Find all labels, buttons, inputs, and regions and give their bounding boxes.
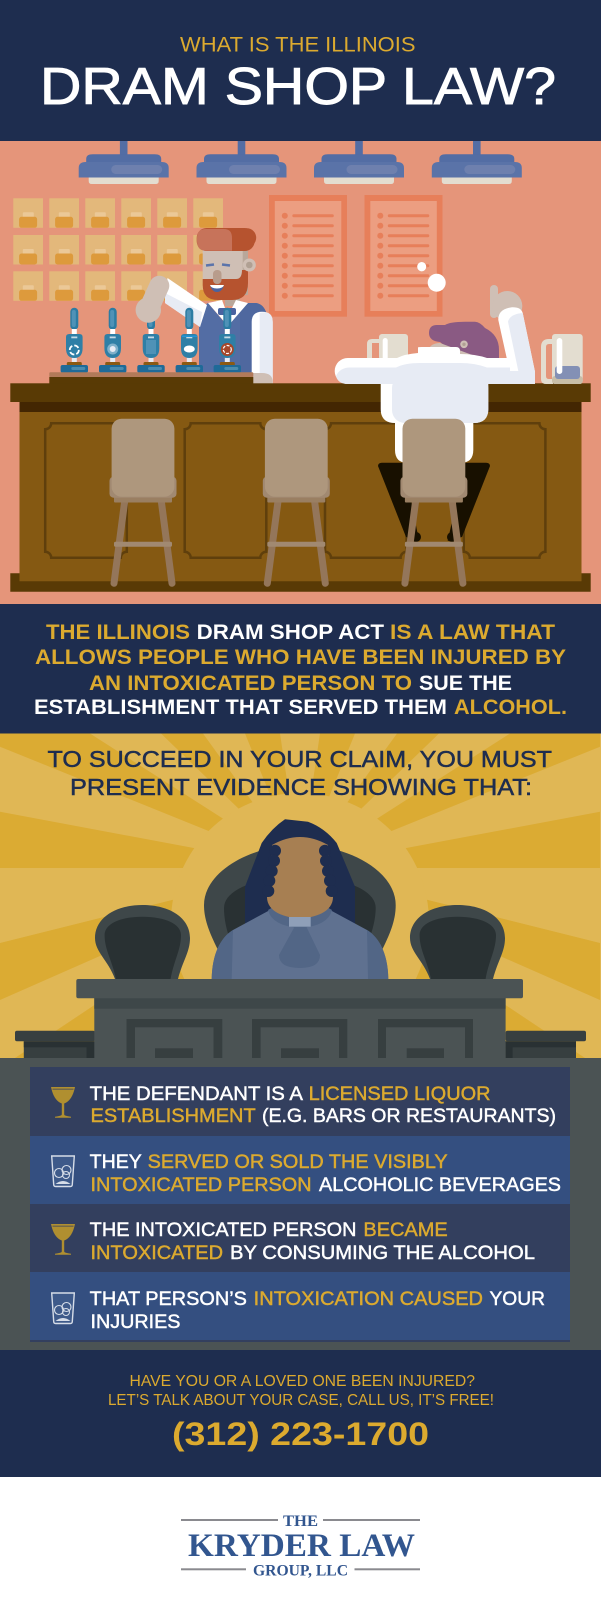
bar stools	[110, 419, 467, 583]
row 3 text: BECAME	[363, 1219, 448, 1241]
panel: judge scene	[0, 734, 601, 1058]
row 2	[30, 1136, 570, 1204]
row 4 text: YOUR	[490, 1288, 545, 1310]
bottle shelves	[13, 198, 223, 301]
row 1 text: THE DEFENDANT IS A	[90, 1083, 303, 1105]
heading: TO SUCCEED IN YOUR CLAIM, YOU MUST	[48, 746, 552, 772]
panel: call to action	[0, 1350, 601, 1477]
panel: definition: IS A LAW THAT	[390, 621, 555, 644]
panel: definition: THE ILLINOIS	[46, 621, 190, 644]
call to action text: LET’S TALK ABOUT YOUR CASE, CALL US, IT’S FREE!	[108, 1392, 494, 1409]
icon: cocktail glass	[51, 1224, 75, 1255]
side benches	[15, 1031, 586, 1058]
halo	[171, 793, 429, 1051]
row 1 text	[90, 1083, 556, 1127]
row 4 text	[90, 1288, 545, 1333]
bartender	[165, 228, 273, 384]
row 4 text: INJURIES	[90, 1311, 180, 1333]
judge chair	[204, 845, 396, 950]
row 1 text: (E.G. BARS OR RESTAURANTS)	[262, 1105, 556, 1127]
logo: GROUP, LLC	[253, 1563, 348, 1580]
row 3 text: INTOXICATED	[90, 1242, 223, 1264]
row 3 text: BY CONSUMING THE ALCOHOL	[230, 1242, 535, 1264]
panel: definition: ESTABLISHMENT THAT SERVED THEM	[34, 696, 447, 719]
row 1	[30, 1067, 570, 1136]
side chair right	[410, 905, 505, 979]
right mug	[541, 334, 583, 384]
side chair left	[95, 905, 190, 979]
panel: header	[0, 0, 601, 142]
row 1 text: ESTABLISHMENT	[90, 1105, 256, 1127]
row 4	[30, 1272, 570, 1342]
icon: whiskey tumbler	[52, 1293, 74, 1324]
bartender hand	[136, 286, 161, 323]
heading: PRESENT EVIDENCE SHOWING THAT:	[70, 774, 532, 800]
logo: KRYDER LAW	[188, 1528, 415, 1564]
sunburst rays	[0, 734, 600, 1058]
icon: whiskey tumbler	[52, 1156, 74, 1186]
title: DRAM SHOP LAW?	[40, 58, 556, 116]
panel: requirements list	[0, 1058, 601, 1350]
row 2 text: THEY	[90, 1151, 142, 1173]
panel: definition: AN INTOXICATED PERSON TO	[89, 672, 412, 695]
menu boards	[269, 195, 442, 317]
panel: bar scene	[0, 141, 601, 604]
call to action text: HAVE YOU OR A LOVED ONE BEEN INJURED?	[130, 1373, 475, 1390]
left mug	[367, 334, 408, 362]
thought bubbles	[417, 262, 446, 292]
logo: THE	[283, 1513, 318, 1530]
row 4 text: INTOXICATION CAUSED	[254, 1288, 483, 1310]
heading	[48, 746, 552, 800]
row 1 text: LICENSED LIQUOR	[309, 1083, 491, 1105]
judge	[212, 819, 388, 979]
bar counter	[10, 383, 591, 592]
panel: definition: SUE THE	[419, 672, 512, 695]
tap tray	[49, 372, 253, 384]
row 2 text: ALCOHOLIC BEVERAGES	[319, 1174, 561, 1196]
panel: definition	[0, 604, 601, 734]
logo	[0, 1477, 601, 1619]
icon: cocktail glass	[51, 1087, 75, 1118]
panel: definition: ALLOWS PEOPLE WHO HAVE BEEN INJURED BY	[35, 646, 566, 669]
phone number: (312) 223-1700	[172, 1416, 429, 1452]
row 4 text: THAT PERSON’S	[90, 1288, 247, 1310]
row 2 text: INTOXICATED PERSON	[90, 1174, 312, 1196]
row 3	[30, 1204, 570, 1272]
row 3 text	[90, 1219, 535, 1264]
call to action text	[108, 1373, 494, 1409]
beer taps	[61, 308, 241, 373]
row 2 text	[90, 1151, 561, 1196]
ceiling lamps	[79, 141, 522, 184]
panel: definition: ALCOHOL.	[454, 696, 567, 719]
row 3 text: THE INTOXICATED PERSON	[90, 1219, 356, 1241]
subtitle: WHAT IS THE ILLINOIS	[180, 34, 416, 57]
row 2 text: SERVED OR SOLD THE VISIBLY	[148, 1151, 448, 1173]
drunk patron	[335, 285, 535, 542]
judge bench	[76, 979, 523, 1058]
panel: definition: DRAM SHOP ACT	[197, 621, 384, 644]
